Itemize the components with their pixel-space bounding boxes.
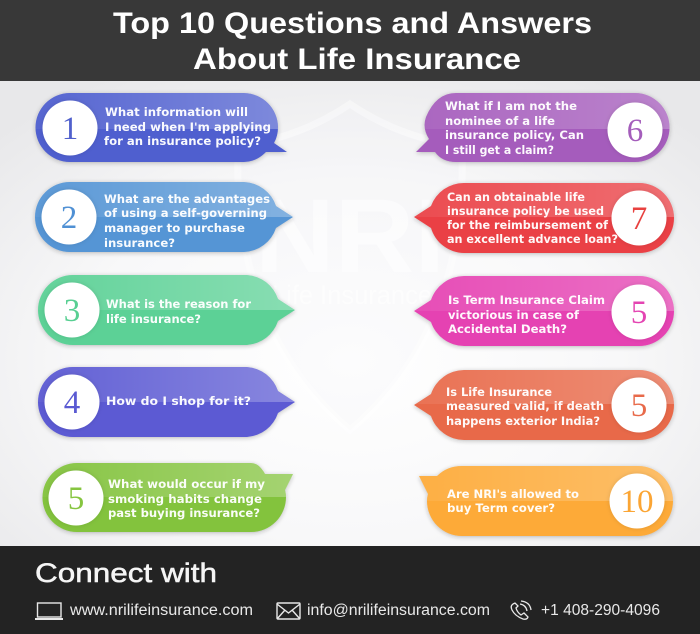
question 8: 5	[631, 295, 647, 331]
question 10: Are NRI's allowed to	[447, 487, 579, 501]
question 1: 1	[62, 111, 78, 147]
question 7: insurance policy be used	[447, 204, 604, 218]
question 10	[419, 466, 673, 536]
question 6: What if I am not the	[445, 99, 577, 113]
question 4: How do I shop for it?	[106, 394, 251, 408]
title	[113, 7, 592, 76]
question 5: smoking habits change	[108, 492, 262, 506]
icon: envelope	[277, 603, 300, 619]
question 7: Can an obtainable life	[447, 190, 585, 204]
title: Top 10 Questions and Answers	[113, 7, 592, 40]
footer band	[0, 546, 700, 634]
question 7: an excellent advance loan?	[447, 232, 618, 246]
email: info@nrilifeinsurance.com	[307, 602, 490, 619]
question 10: 10	[620, 484, 654, 520]
question 3: life insurance?	[106, 312, 201, 326]
question 4: 4	[64, 385, 80, 421]
question 5: past buying insurance?	[108, 506, 260, 520]
background	[0, 80, 700, 548]
footer heading: Connect with	[35, 558, 217, 588]
question 3: What is the reason for	[106, 297, 251, 311]
icon: laptop	[35, 603, 63, 619]
question 7	[414, 183, 674, 253]
question 8	[414, 276, 674, 346]
title: About Life Insurance	[193, 43, 521, 76]
question 8: Is Term Insurance Claim	[448, 293, 605, 307]
question 6	[416, 93, 670, 162]
question 9: measured valid, if death	[446, 399, 604, 413]
watermark: shield and NRI logo: Life Insurance	[272, 280, 432, 310]
question 3	[38, 275, 295, 345]
question 1: What information will	[105, 105, 248, 119]
question 7: for the reimbursement of	[447, 218, 609, 232]
question 2: What are the advantages	[104, 192, 270, 206]
question 6: nominee of a life	[445, 114, 555, 128]
question 8: Accidental Death?	[448, 322, 567, 336]
question 5	[42, 463, 293, 532]
question 2: 2	[61, 200, 77, 236]
question 4	[38, 367, 295, 437]
question 2: insurance?	[104, 236, 175, 250]
question 9	[414, 370, 674, 440]
question 3: 3	[64, 293, 80, 329]
icon: phone	[511, 601, 531, 619]
phone number: +1 408-290-4096	[541, 602, 660, 619]
header band	[0, 0, 700, 81]
question 1: for an insurance policy?	[104, 134, 261, 148]
question 1	[36, 93, 287, 162]
question 1: I need when I'm applying	[105, 120, 271, 134]
website: www.nrilifeinsurance.com	[69, 602, 253, 619]
question 9: happens exterior India?	[446, 414, 600, 428]
question 10: buy Term cover?	[447, 501, 555, 515]
watermark: shield and NRI logo	[238, 104, 462, 430]
question 8: victorious in case of	[448, 308, 580, 322]
question 2: of using a self-governing	[104, 206, 267, 220]
question 5: 5	[68, 481, 84, 517]
question 6: 6	[627, 113, 643, 149]
question 7: 7	[631, 201, 647, 237]
question 6: insurance policy, Can	[445, 128, 584, 142]
question 9: Is Life Insurance	[446, 385, 552, 399]
question 2: manager to purchase	[104, 221, 245, 235]
question 6: I still get a claim?	[445, 143, 554, 157]
question 9: 5	[631, 388, 647, 424]
question 5: What would occur if my	[108, 477, 265, 491]
question 2	[35, 182, 293, 252]
watermark: shield and NRI logo: NRI	[255, 178, 445, 295]
